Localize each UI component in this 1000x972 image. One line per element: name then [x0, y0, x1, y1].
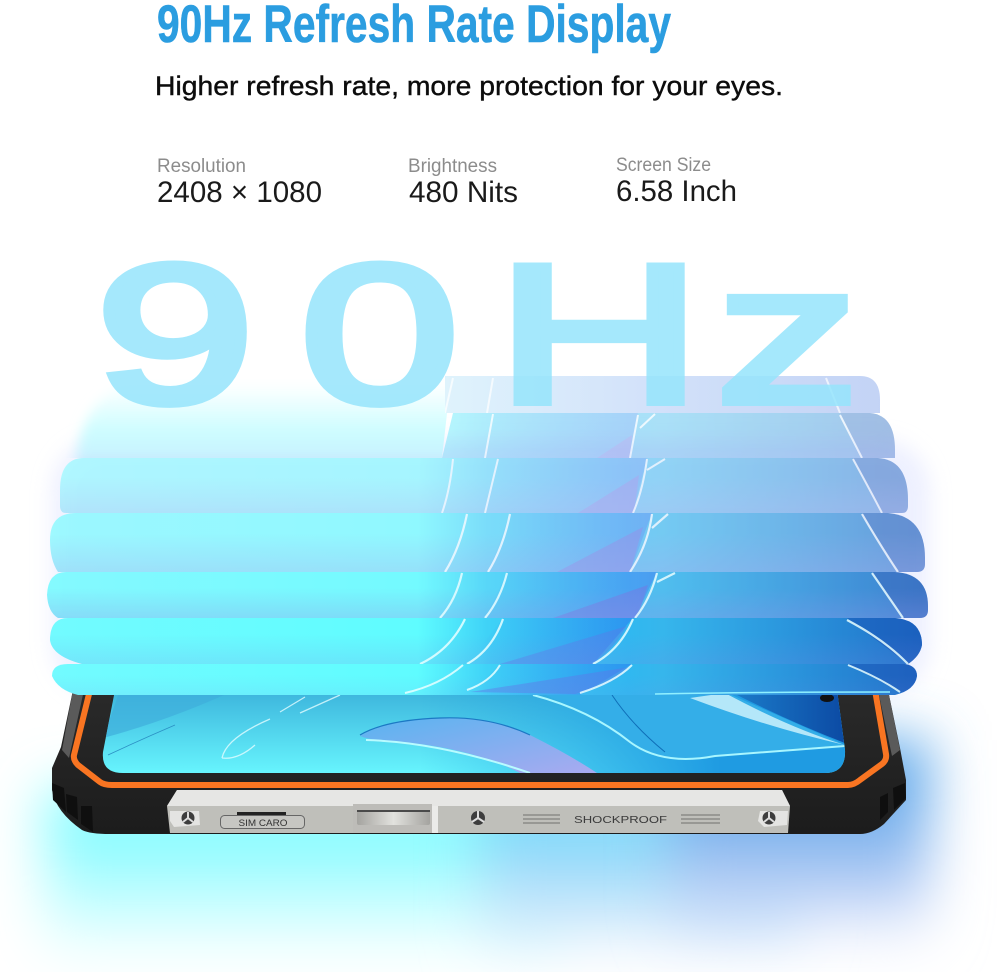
subtitle: Higher refresh rate, more protection for your eyes. — [155, 71, 783, 101]
background glow beneath phone — [45, 740, 930, 972]
layer 6 — [52, 664, 917, 695]
silver bar top bevel — [167, 790, 790, 806]
SIM slot label: SIM CARO — [238, 818, 288, 828]
screw right — [758, 811, 788, 827]
dark grey side edge — [62, 690, 900, 758]
large 90Hz text: 90Hz — [96, 224, 859, 444]
spec: brightness: 480 Nits — [409, 176, 518, 209]
phone rubber body — [52, 690, 906, 834]
screw left — [170, 811, 200, 827]
phone — [52, 690, 906, 834]
layer 4 — [47, 572, 928, 618]
silver bar — [167, 790, 790, 833]
halo around refresh layers — [52, 440, 930, 695]
layer 5 — [50, 618, 922, 664]
spec: resolution: Resolution — [157, 156, 246, 177]
shockproof label — [523, 814, 720, 826]
button recess — [353, 804, 438, 833]
layer 0 — [445, 376, 880, 413]
corner grips — [52, 783, 906, 832]
spec: screen size: 6.58 Inch — [616, 175, 737, 208]
spec: resolution — [157, 156, 322, 209]
spec: resolution: 2408 × 1080 — [157, 176, 322, 209]
layer 3 — [50, 513, 925, 572]
SIM slot label — [220, 812, 304, 828]
layer 1 — [442, 413, 895, 458]
spec: brightness: Brightness — [408, 156, 497, 177]
screen — [100, 690, 850, 775]
screw middle — [471, 811, 485, 825]
orange frame — [74, 690, 886, 785]
refresh layers stack — [47, 376, 928, 695]
spec: screen size — [616, 155, 737, 208]
layer 2 — [60, 458, 908, 513]
left haze of upper layers — [72, 392, 447, 458]
camera notch — [820, 694, 834, 702]
shockproof label: SHOCKPROOF — [574, 814, 667, 826]
spec: brightness — [408, 156, 518, 209]
spec: screen size: Screen Size — [616, 155, 711, 176]
